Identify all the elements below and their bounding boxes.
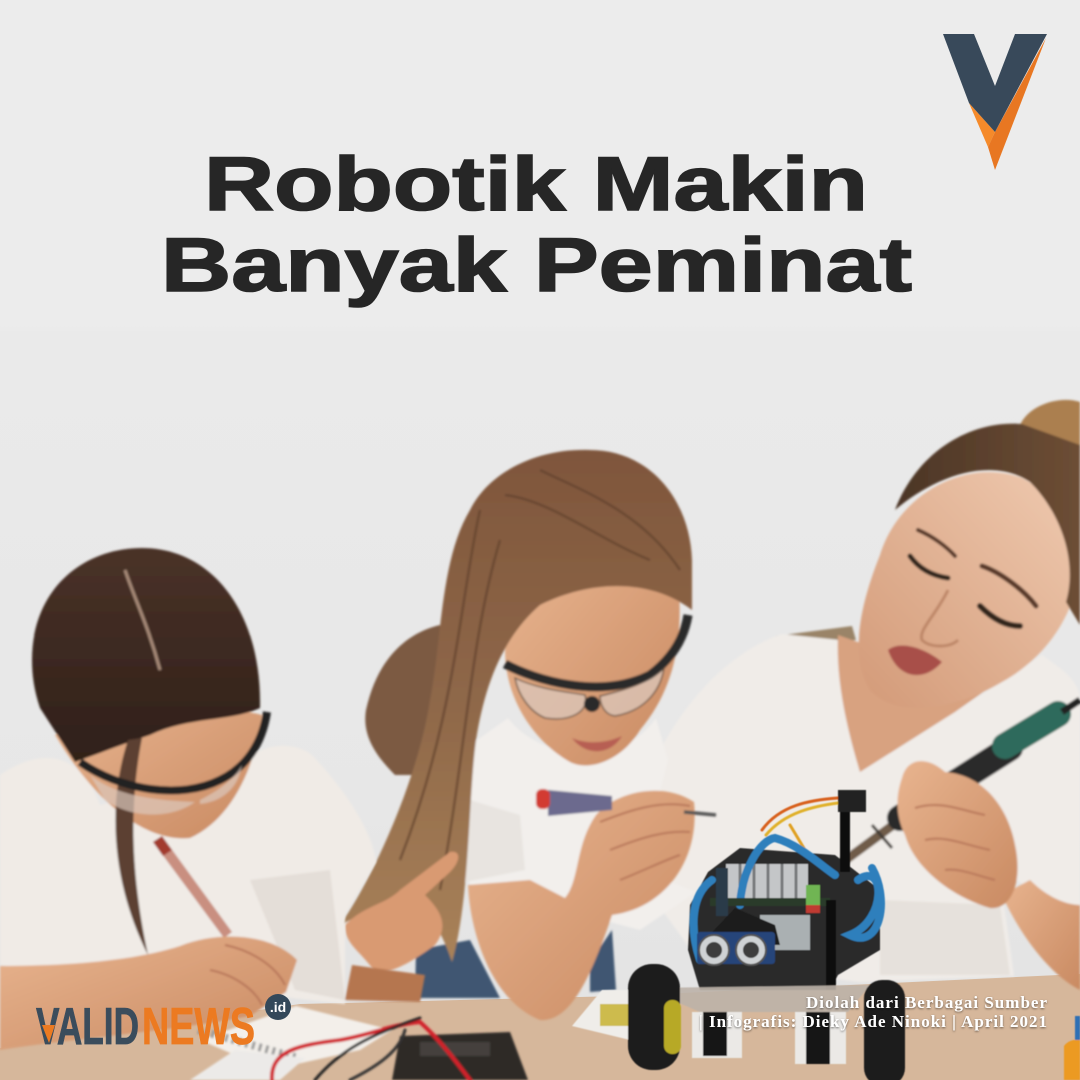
mast (840, 792, 850, 872)
photo: middle girl (340, 450, 716, 1020)
woman nose (921, 590, 958, 646)
motors (692, 1012, 846, 1064)
chassis plate (645, 985, 870, 1012)
table (0, 974, 1080, 1080)
brown collar behind neck (776, 626, 856, 648)
woman neck (838, 635, 1000, 772)
face (505, 560, 680, 765)
source credits: Diolah dari Berbagai Sumber (806, 993, 1047, 1012)
woman face (859, 472, 1079, 708)
back hair (365, 625, 470, 775)
title: Banyak Peminat (161, 223, 912, 308)
woman hand (897, 761, 1018, 908)
shirt (462, 718, 696, 930)
woman hair (895, 424, 1080, 625)
brand logo: VALIDNEWS.id (36, 994, 291, 1056)
photo: notebook, calculator and multimeter (190, 1006, 528, 1080)
motor block (572, 990, 632, 1040)
arm and hand holding screwdriver (468, 791, 695, 1020)
jeans (415, 930, 616, 998)
source credits (699, 993, 1047, 1031)
title (161, 142, 912, 308)
small orange cup (1064, 1040, 1080, 1080)
woman eyes and brows (910, 530, 1036, 626)
face (55, 705, 262, 838)
hair (32, 548, 260, 762)
heat sinks and boards (726, 864, 808, 900)
hair strand (115, 738, 148, 955)
soldering iron (832, 700, 1080, 870)
woman bun (1018, 400, 1080, 452)
mouth (572, 736, 622, 751)
notebook (200, 1006, 392, 1070)
robot upper wiring (694, 798, 881, 960)
pointing hand (345, 852, 458, 972)
wheel right (864, 980, 905, 1080)
brand logo: V mark (943, 34, 1047, 170)
photo: robot car (572, 790, 1080, 1080)
goggles (505, 615, 688, 719)
arm and hand (0, 937, 297, 1050)
red and black wires (272, 1018, 470, 1080)
photo: left girl (0, 548, 425, 1050)
pen (153, 836, 232, 938)
screwdriver (536, 789, 716, 816)
title: Robotik Makin (204, 142, 868, 227)
brand logo: VALIDNEWS.id: VALID (36, 998, 139, 1056)
woman mouth (888, 646, 942, 675)
brand logo: VALIDNEWS.id: NEWS (142, 998, 255, 1056)
multimeter (392, 1032, 528, 1080)
robot dark body (688, 848, 880, 990)
wheel left (628, 964, 681, 1070)
woman arm (1002, 880, 1080, 990)
woman shirt (640, 634, 1080, 982)
ultrasonic sensor (697, 932, 775, 965)
hair (340, 450, 692, 962)
calculator (190, 1050, 305, 1080)
shirt (0, 746, 376, 1004)
brand logo: VALIDNEWS.id: .id (270, 999, 286, 1015)
goggles (80, 712, 267, 815)
photo: woman instructor (640, 400, 1080, 990)
notebook spiral (198, 1030, 298, 1058)
source credits: | Infografis: Dieky Ade Ninoki | April 2021 (699, 1012, 1047, 1031)
